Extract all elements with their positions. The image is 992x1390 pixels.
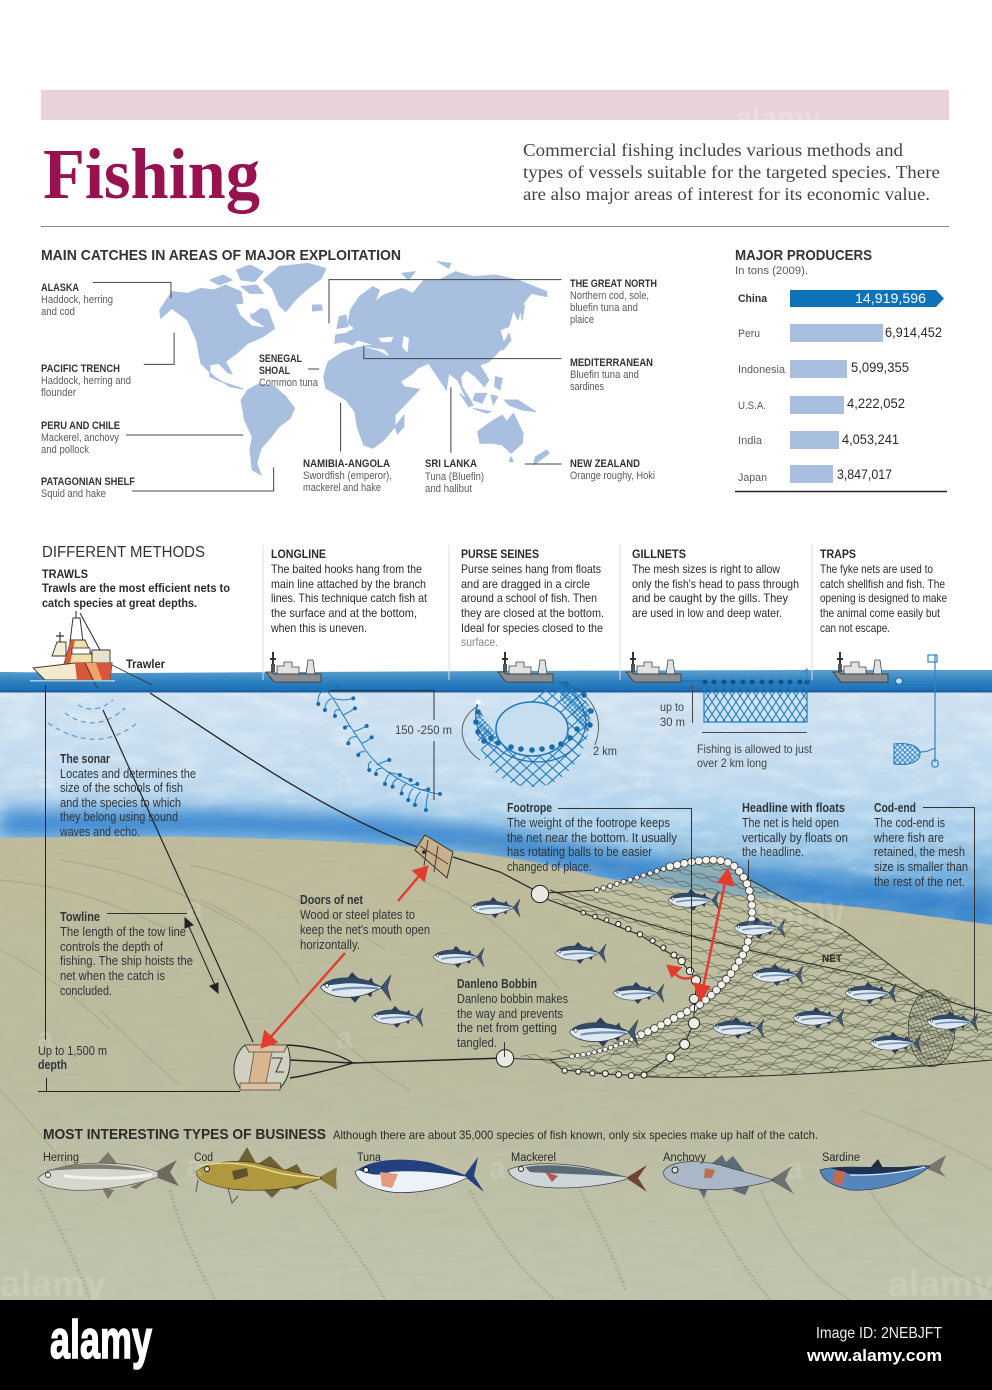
diagram: gillnet: over 2 km long xyxy=(697,756,767,770)
annotation: footrope xyxy=(507,801,678,874)
text block: traps xyxy=(820,547,947,635)
watermarks: a xyxy=(937,762,954,795)
label: New Zealand xyxy=(570,458,655,482)
label: Peru and Chile: Mackerel, anchovy xyxy=(41,432,119,444)
intro text xyxy=(523,140,940,204)
label: Peru and Chile xyxy=(41,420,120,456)
watermarks: alamy xyxy=(0,1263,106,1304)
annotation: doors of net xyxy=(300,893,430,952)
annotation: headline with floats xyxy=(742,801,848,859)
annotation: the sonar: they belong using sound xyxy=(60,810,178,824)
annotation: danleno bobbin: Danleno bobbin makes xyxy=(457,992,568,1006)
text block: purse seines: Purse seines hang from floats xyxy=(461,562,601,576)
fish: mackerel xyxy=(508,1152,647,1192)
annotation: cod-end: where fish are xyxy=(873,831,944,845)
icon: gillnet vessel xyxy=(626,652,681,682)
producers subtitle: In tons (2009). xyxy=(735,265,808,277)
diagram: trap xyxy=(894,655,938,767)
panel: most interesting types of business xyxy=(38,1126,946,1203)
map leader lines xyxy=(93,280,562,491)
fish: cod: Cod xyxy=(194,1152,213,1164)
annotation: doors of net: Doors of net xyxy=(300,893,364,907)
watermarks: a xyxy=(37,1022,54,1055)
watermarks: a xyxy=(336,1022,353,1055)
label: Trawler: Trawler xyxy=(126,657,165,671)
diagram: gillnet: up to xyxy=(660,700,684,714)
annotation: danleno bobbin xyxy=(457,977,568,1050)
annotation: towline: Towline xyxy=(60,910,100,924)
world map xyxy=(160,262,549,475)
label: Sri Lanka: SRI LANKA xyxy=(425,458,477,470)
business subheading: Although there are about 35,000 species of fish known, only six species make up half of the catch. xyxy=(333,1128,818,1142)
annotation: cod-end: The cod-end is xyxy=(874,816,945,830)
methods heading: DIFFERENT METHODS xyxy=(42,544,205,561)
panel: major producers xyxy=(735,247,947,492)
watermarks: a xyxy=(186,892,203,925)
intro text: types of vessels suitable for the targeted species. There xyxy=(523,162,940,182)
label: Mediterranean xyxy=(570,357,653,393)
school of fish xyxy=(320,889,978,1054)
text block: gillnets: are used in low and deep water. xyxy=(632,606,782,620)
text block: purse seines xyxy=(461,547,604,649)
icon: upper net door xyxy=(415,835,453,878)
fish: anchovy: Anchovy xyxy=(663,1152,706,1164)
annotation: footrope: the net near the bottom. It usually xyxy=(507,831,678,845)
label: Pacific Trench: PACIFIC TRENCH xyxy=(41,363,120,375)
label: Pacific Trench xyxy=(41,363,131,399)
fish: tuna xyxy=(355,1152,484,1193)
text block: purse seines: Ideal for species closed to the xyxy=(461,621,603,635)
label: Alaska: and cod xyxy=(41,306,75,318)
bar chart: Japan xyxy=(738,472,767,484)
watermarks: a xyxy=(336,762,353,795)
watermarks: a xyxy=(489,1152,506,1185)
label: Senegal Shoal: SHOAL xyxy=(259,365,290,377)
annotation leader lines xyxy=(107,808,974,1057)
icon: trap vessel xyxy=(833,652,888,682)
label: Sri Lanka xyxy=(425,458,484,495)
annotation: the sonar: The sonar xyxy=(60,752,110,766)
label: Senegal Shoal: SENEGAL xyxy=(259,353,302,365)
annotation: the sonar: waves and echo. xyxy=(59,825,140,839)
annotation: the sonar: size of the schools of fish xyxy=(60,781,183,795)
annotation: towline xyxy=(60,910,193,998)
text block: longline: LONGLINE xyxy=(271,547,326,561)
annotation: headline with floats: The net is held open xyxy=(742,816,839,830)
bar chart: China xyxy=(738,293,768,305)
text block: gillnets: only the fish's head to pass through xyxy=(632,577,799,591)
text block: purse seines: surface. xyxy=(461,635,498,649)
diagram: trawl net xyxy=(496,860,992,1079)
fish: mackerel: Mackerel xyxy=(511,1152,556,1164)
watermarks: alamy xyxy=(735,102,821,135)
header band xyxy=(41,90,949,120)
text block: traps: the animal come easily but xyxy=(820,606,941,620)
annotation: cod-end xyxy=(873,801,968,889)
label: Senegal Shoal xyxy=(259,353,319,389)
footrope ball chain xyxy=(540,897,701,1079)
trawls text xyxy=(42,581,230,610)
trawls heading: TRAWLS xyxy=(42,567,88,581)
label: Mediterranean: MEDITERRANEAN xyxy=(570,357,653,369)
label: Sri Lanka: and halibut xyxy=(425,483,472,495)
annotation: doors of net: keep the net's mouth open xyxy=(300,923,430,937)
annotation: headline with floats: Headline with floats xyxy=(742,801,845,815)
label: Peru and Chile: and pollock xyxy=(41,444,89,456)
annotation: footrope: has rotating balls to be easier xyxy=(507,845,652,859)
label: Alaska: Haddock, herring xyxy=(41,294,113,306)
business heading: MOST INTERESTING TYPES OF BUSINESS xyxy=(43,1126,326,1143)
bar chart: 5,099,355 xyxy=(851,359,909,375)
text block: purse seines: PURSE SEINES xyxy=(461,547,539,561)
text block: traps: opening is designed to make xyxy=(820,591,947,605)
headline float chain xyxy=(507,860,753,1060)
text block: longline: the surface and at the bottom, xyxy=(271,606,417,620)
label: Patagonian Shelf: PATAGONIAN SHELF xyxy=(41,476,135,488)
fish: tuna: Tuna xyxy=(357,1152,382,1164)
label: New Zealand: Orange roughy, Hoki xyxy=(570,470,655,482)
annotation: cod-end: the rest of the net. xyxy=(874,875,965,889)
annotation: doors of net: horizontally. xyxy=(300,938,360,952)
towline double arrow xyxy=(185,918,218,993)
icon: purse seine vessel xyxy=(498,652,553,682)
text block: longline: when this is uneven. xyxy=(270,621,367,635)
watermarks: a xyxy=(37,762,54,795)
diagram: longline xyxy=(316,683,442,812)
trawls text: catch species at great depths. xyxy=(42,596,197,610)
label: Mediterranean: sardines xyxy=(570,381,604,393)
text block: traps: The fyke nets are used to xyxy=(820,562,933,576)
footer image id: Image ID: 2NEBJFT xyxy=(816,1325,942,1342)
text block: longline xyxy=(270,547,428,635)
depth marker: longline xyxy=(330,690,452,800)
depth marker: longline: 150 -250 m xyxy=(395,723,452,737)
text block: longline: main line attached by the branch xyxy=(271,577,426,591)
bar chart: 3,847,017 xyxy=(837,466,892,482)
label: The Great North: THE GREAT NORTH xyxy=(570,278,657,290)
label: Namibia-Angola: Swordfish (emperor), xyxy=(303,470,392,482)
label: Peru and Chile: PERU AND CHILE xyxy=(41,420,120,432)
label: Mediterranean: Bluefin tuna and xyxy=(570,369,639,381)
diagram: gillnet: Fishing is allowed to just xyxy=(697,742,813,756)
annotation: the sonar: and the species to which xyxy=(60,796,181,810)
footer logo: alamy xyxy=(50,1310,152,1370)
label: Namibia-Angola xyxy=(303,458,392,494)
watermarks: a xyxy=(786,1152,803,1185)
annotation: depth: depth xyxy=(38,1058,67,1072)
depth line xyxy=(38,685,240,1092)
bar chart xyxy=(735,290,947,492)
fish: sardine xyxy=(820,1152,946,1190)
bar chart: Peru xyxy=(738,328,760,340)
watermarks: alamy xyxy=(888,1263,992,1304)
diagram: purse seine: 2 km xyxy=(593,744,617,758)
map heading: MAIN CATCHES IN AREAS OF MAJOR EXPLOITATION xyxy=(41,247,401,264)
red arrows xyxy=(262,867,733,1047)
fish: anchovy xyxy=(663,1152,794,1198)
label: Alaska: ALASKA xyxy=(41,282,79,294)
annotation: depth xyxy=(38,1044,107,1072)
label: Pacific Trench: flounder xyxy=(41,387,76,399)
diagram: gillnet xyxy=(660,669,813,770)
trawls text: Trawls are the most efficient nets to xyxy=(42,581,230,595)
fish: cod xyxy=(194,1147,337,1203)
annotation: cod-end: size is smaller than xyxy=(874,860,968,874)
tow lines xyxy=(103,693,540,1078)
label: Patagonian Shelf: Squid and hake xyxy=(41,488,106,500)
text block: longline: lines. This technique catch fish at xyxy=(271,591,428,605)
panel: ocean scene background xyxy=(0,670,992,1300)
text block: traps: catch shellfish and fish. The xyxy=(820,577,945,591)
annotation: towline: The length of the tow line xyxy=(60,925,186,939)
intro text: are also major areas of interest for its economic value. xyxy=(523,184,930,204)
annotation: cod-end: Cod-end xyxy=(874,801,916,815)
text block: purse seines: they are closed at the bottom. xyxy=(461,606,604,620)
label: The Great North xyxy=(570,278,657,326)
label: Namibia-Angola: NAMIBIA-ANGOLA xyxy=(303,458,390,470)
annotation: danleno bobbin: the net from getting xyxy=(457,1021,557,1035)
label: The Great North: bluefin tuna and xyxy=(570,302,638,314)
bar chart: 4,053,241 xyxy=(842,431,899,447)
bar chart: India xyxy=(738,435,763,447)
panel: different methods intro xyxy=(42,544,230,610)
annotation: danleno bobbin: the way and prevents xyxy=(457,1007,563,1021)
annotation: the sonar: Locates and determines the xyxy=(60,767,196,781)
diagram: gillnet: 30 m xyxy=(660,715,685,729)
annotation: headline with floats: the headline. xyxy=(742,845,804,859)
annotation: footrope: The weight of the footrope keeps xyxy=(507,816,670,830)
footer band xyxy=(0,1300,992,1390)
annotation: doors of net: Wood or steel plates to xyxy=(300,908,415,922)
annotation: footrope: changed of place. xyxy=(507,860,592,874)
text block: traps: TRAPS xyxy=(820,547,856,561)
label: Alaska xyxy=(41,282,113,318)
label: Senegal Shoal: Common tuna xyxy=(259,377,319,389)
annotation: headline with floats: vertically by floats on xyxy=(742,831,848,845)
bar chart: 6,914,452 xyxy=(885,324,942,340)
annotation: footrope: Footrope xyxy=(507,801,552,815)
footer url: www.alamy.com xyxy=(806,1346,942,1365)
label: The Great North: plaice xyxy=(570,314,594,326)
label: NET: NET xyxy=(822,953,842,965)
label: New Zealand: NEW ZEALAND xyxy=(570,458,640,470)
annotation: towline: concluded. xyxy=(60,984,112,998)
annotation: towline: net when the catch is xyxy=(60,969,165,983)
icon: longline vessel xyxy=(266,652,321,682)
annotation: depth: Up to 1,500 m xyxy=(38,1044,107,1058)
label: Pacific Trench: Haddock, herring and xyxy=(41,375,131,387)
bar chart: 4,222,052 xyxy=(847,395,905,411)
fish: herring xyxy=(38,1152,179,1199)
panel: main catches map xyxy=(41,247,657,500)
diagram: purse seine xyxy=(462,680,617,787)
text block: gillnets: and be caught by the gills. They xyxy=(632,591,788,605)
intro text: Commercial fishing includes various methods and xyxy=(523,140,903,160)
bar chart: Indonesia xyxy=(738,364,786,376)
annotation: cod-end: retained, the mesh xyxy=(874,845,965,859)
watermarks: alamy xyxy=(747,884,845,942)
producers heading: MAJOR PRODUCERS xyxy=(735,247,872,264)
bar chart: U.S.A. xyxy=(738,400,766,412)
text block: traps: can not escape. xyxy=(820,621,890,635)
annotation: towline: fishing. The ship hoists the xyxy=(60,954,193,968)
annotation: towline: controls the depth of xyxy=(60,940,163,954)
label: Namibia-Angola: mackerel and hake xyxy=(303,482,381,494)
fish: sardine: Sardine xyxy=(822,1152,860,1164)
icon: trawler ship xyxy=(30,611,152,688)
fish: herring: Herring xyxy=(43,1152,79,1164)
annotation: danleno bobbin: tangled. xyxy=(457,1036,497,1050)
text block: purse seines: and are dragged in a circle xyxy=(461,577,590,591)
label: The Great North: Northern cod, sole, xyxy=(570,290,649,302)
text block: purse seines: around a school of fish. Then xyxy=(461,591,597,605)
text block: gillnets: GILLNETS xyxy=(632,547,686,561)
title: Fishing xyxy=(43,134,260,214)
text block: longline: The baited hooks hang from the xyxy=(271,562,422,576)
text block: gillnets xyxy=(632,547,799,620)
icon: lower net door xyxy=(234,1045,290,1090)
annotation: danleno bobbin: Danleno Bobbin xyxy=(457,977,537,991)
annotation: the sonar xyxy=(59,752,196,839)
label: Patagonian Shelf xyxy=(41,476,135,500)
bar chart: 14,919,596 xyxy=(855,290,926,306)
watermarks: a xyxy=(186,1150,203,1183)
net end balls xyxy=(496,885,549,1067)
watermarks: a xyxy=(635,762,652,795)
sonar waves xyxy=(48,700,136,739)
label: Sri Lanka: Tuna (Bluefin) xyxy=(425,471,484,483)
text block: gillnets: The mesh sizes is right to allow xyxy=(632,562,780,576)
